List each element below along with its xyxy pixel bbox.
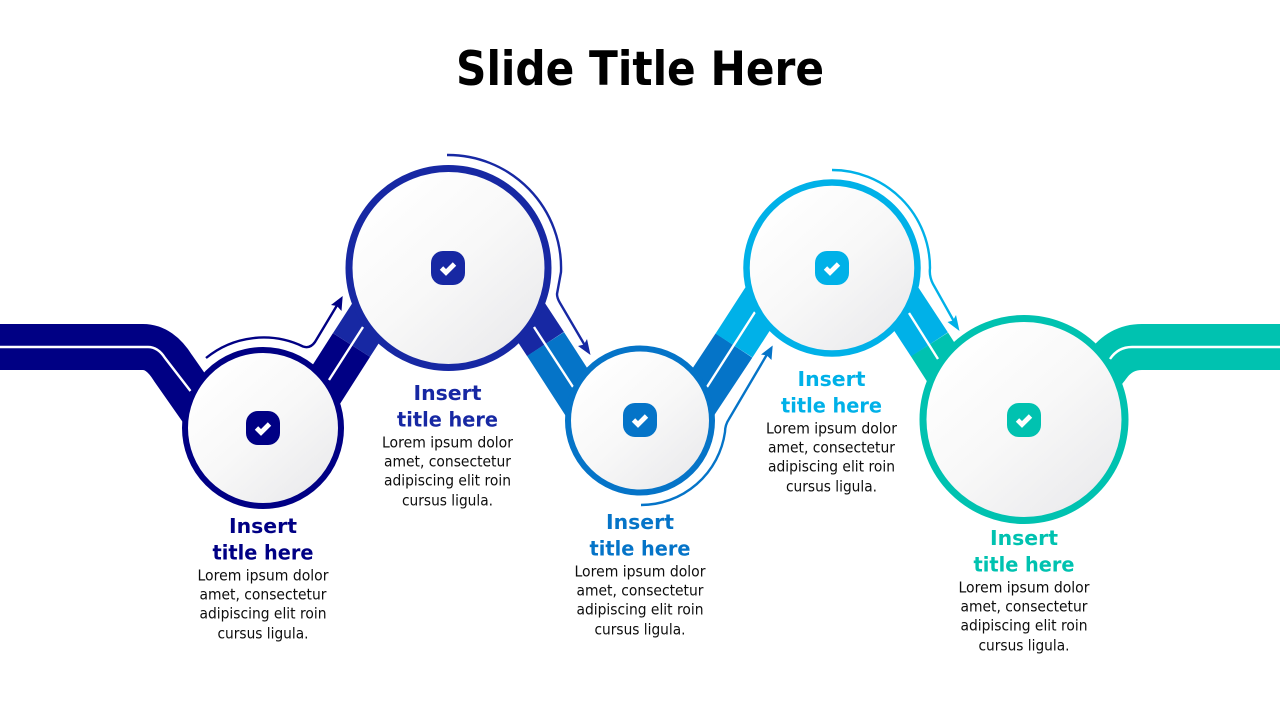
- icon: check badge: [431, 251, 465, 285]
- heading: Insert: [990, 526, 1058, 550]
- band: step 4 to step 5: [895, 292, 965, 400]
- body: [382, 433, 514, 510]
- body: Lorem ipsum dolor: [574, 562, 706, 580]
- heading: title here: [590, 536, 690, 560]
- heading: title here: [397, 408, 498, 432]
- heading: Insert: [229, 514, 297, 538]
- body: Lorem ipsum dolor: [198, 566, 329, 584]
- body: amet, consectetur: [576, 581, 704, 599]
- band: step 3 to step 4: [690, 282, 775, 412]
- arrow: [447, 155, 590, 355]
- heading: Insert: [606, 510, 674, 534]
- circle: [568, 348, 712, 492]
- band: step 1 to step 2: [310, 293, 385, 410]
- icon: check badge: [815, 251, 849, 285]
- step 1 text: [198, 514, 329, 642]
- step 5 text: [958, 526, 1090, 654]
- body: cursus ligula.: [594, 620, 686, 638]
- step 1 node: [185, 296, 343, 506]
- body: [958, 578, 1090, 654]
- icon: check badge: [246, 411, 280, 445]
- body: Lorem ipsum dolor: [382, 433, 514, 451]
- band: right exit: [1064, 347, 1280, 420]
- arrow: [206, 296, 343, 358]
- body: Lorem ipsum dolor: [958, 578, 1090, 596]
- title: Slide Title Here: [456, 42, 824, 97]
- circle: [923, 318, 1125, 520]
- heading: [397, 381, 498, 432]
- step 2 node: [349, 155, 590, 368]
- body: adipiscing elit roin: [960, 616, 1088, 634]
- body: cursus ligula.: [218, 624, 308, 642]
- step 3 node: [568, 346, 773, 505]
- step 3 text: [574, 510, 706, 638]
- step 4 text: [766, 367, 898, 496]
- heading: title here: [974, 552, 1074, 576]
- body: [766, 419, 898, 496]
- body: amet, consectetur: [384, 452, 512, 470]
- body: adipiscing elit roin: [200, 604, 326, 622]
- heading: Insert: [414, 381, 482, 405]
- heading: [590, 510, 690, 560]
- heading: Insert: [798, 367, 866, 391]
- circle: [185, 350, 341, 506]
- body: amet, consectetur: [960, 597, 1088, 615]
- arrow: [641, 346, 773, 505]
- band: left entry: [0, 347, 215, 428]
- step 5 node: [923, 318, 1125, 520]
- body: cursus ligula.: [978, 636, 1070, 654]
- step 2 text: [382, 381, 514, 510]
- body: adipiscing elit roin: [768, 457, 895, 475]
- heading: [212, 514, 314, 564]
- body: cursus ligula.: [786, 478, 877, 496]
- band: step 2 to step 3: [510, 290, 590, 413]
- body: Lorem ipsum dolor: [766, 419, 898, 437]
- connector bands: [0, 282, 1280, 428]
- arrow: [832, 170, 960, 331]
- body: [198, 566, 329, 642]
- heading: [974, 526, 1074, 576]
- step 4 node: [746, 170, 960, 354]
- heading: title here: [212, 540, 314, 564]
- icon: check badge: [623, 403, 657, 437]
- circle: [746, 182, 918, 354]
- body: [574, 562, 706, 638]
- heading: title here: [781, 394, 882, 418]
- body: adipiscing elit roin: [384, 471, 511, 489]
- icon: check badge: [1007, 403, 1041, 437]
- body: adipiscing elit roin: [576, 600, 704, 618]
- body: amet, consectetur: [768, 438, 896, 456]
- heading: [781, 367, 882, 418]
- circle: [349, 168, 548, 368]
- body: cursus ligula.: [402, 492, 493, 510]
- body: amet, consectetur: [200, 585, 327, 603]
